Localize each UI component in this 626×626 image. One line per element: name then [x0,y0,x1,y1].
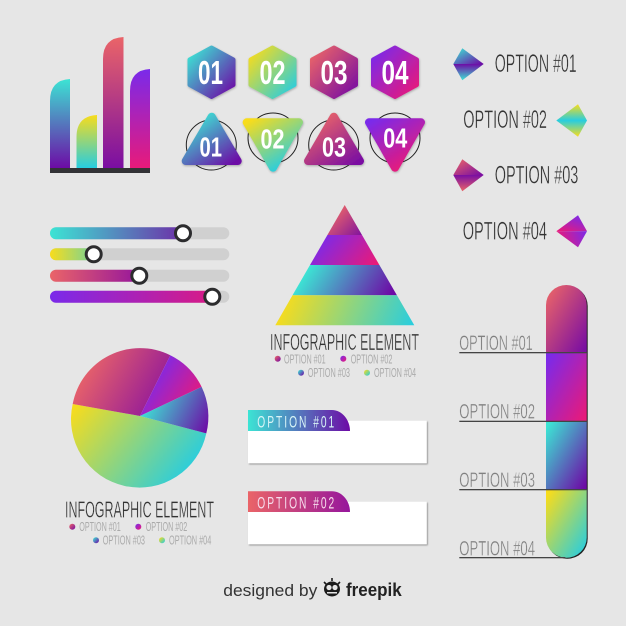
legend item 2 [135,520,187,534]
bar 4 [130,69,150,168]
legend item 4: OPTION #04 [374,366,416,380]
hexagon 01: 01 [198,54,223,91]
bar shadow [547,286,588,559]
hexagon 02: 02 [260,54,286,91]
hexagon 02 [250,48,294,97]
vertical stacked bar [546,285,588,559]
label 03: OPTION #03 [459,468,535,492]
triangle 01: 01 [200,132,222,163]
segment 2 [546,353,587,421]
label 02: OPTION #02 [459,400,535,424]
pyramid layer 4 [275,295,414,325]
segment 1 [546,285,587,353]
pyramid chart [275,205,414,325]
triangle 04: 04 [383,122,408,154]
hexagon 01 [190,48,234,97]
triangle badges [186,113,421,170]
option 04: OPTION #04 [463,218,547,245]
pie slice teal [140,387,208,433]
slider group [50,226,229,304]
legend item 2: OPTION #02 [351,352,392,366]
bar 2 [76,115,97,168]
legend item 3: OPTION #03 [308,366,350,380]
tab label: OPTION #01 [257,413,336,431]
text box option 01 [248,410,427,463]
option 01 [453,48,577,80]
triangle 02 [247,113,299,168]
pyramid legend [275,352,416,380]
box body [248,421,427,463]
footer attribution [223,578,403,600]
legend item 4 [364,366,416,380]
pie title: INFOGRAPHIC ELEMENT [65,496,214,522]
tab [248,491,350,512]
hexagon 03: 03 [320,54,348,91]
triangle 04 [369,113,421,168]
slider 1 [50,226,229,241]
legend item 1 [69,520,121,534]
pyramid layer 1 [327,205,362,235]
segment 3 [546,421,587,490]
legend item 3: OPTION #03 [103,533,145,547]
bar 1 [50,79,70,168]
legend item 2: OPTION #02 [146,520,187,534]
bar 3 [103,37,124,168]
triangle 02: 02 [260,123,284,154]
option 02: OPTION #02 [463,107,547,134]
hexagon 04 [373,48,417,97]
option 03 [453,159,578,191]
legend item 1: OPTION #01 [79,520,121,534]
slider 3 [50,268,229,283]
legend item 1 [275,352,326,366]
legend item 1: OPTION #01 [284,352,326,366]
diamond option list [453,48,587,247]
legend item 3 [93,533,145,547]
pie chart [71,348,208,488]
pie slice green [71,404,206,488]
label 04: OPTION #04 [459,536,535,560]
tab [248,410,350,431]
slider 4 [50,289,229,304]
hexagon 03 [312,48,356,97]
hexagon 04: 04 [382,54,409,91]
legend item 2 [340,352,392,366]
box body [248,502,427,544]
icon: freepik bee [324,578,340,596]
slider 2 [50,247,229,262]
legend item 4 [159,533,211,547]
triangle 01 [186,117,238,170]
pie legend [69,520,211,547]
pyramid layer 3 [292,265,397,295]
pie slice red [73,348,170,416]
text box option 02 [248,491,427,544]
label 01: OPTION #01 [459,331,533,355]
designed by: designed by [223,581,318,600]
triangle 03 [308,117,360,170]
triangle 03: 03 [322,132,346,163]
pyramid layer 2 [310,235,379,265]
tab label: OPTION #02 [257,494,336,512]
pie slice purple [140,355,202,416]
legend item 4: OPTION #04 [169,533,211,547]
freepik wordmark: freepik [346,580,403,600]
bar chart [50,37,150,173]
hexagon badges [190,48,417,97]
segment 4 [546,490,587,558]
chart axis [50,168,150,173]
pyramid title: INFOGRAPHIC ELEMENT [270,329,419,355]
legend item 3 [298,366,350,380]
vertical bar labels [459,331,587,560]
